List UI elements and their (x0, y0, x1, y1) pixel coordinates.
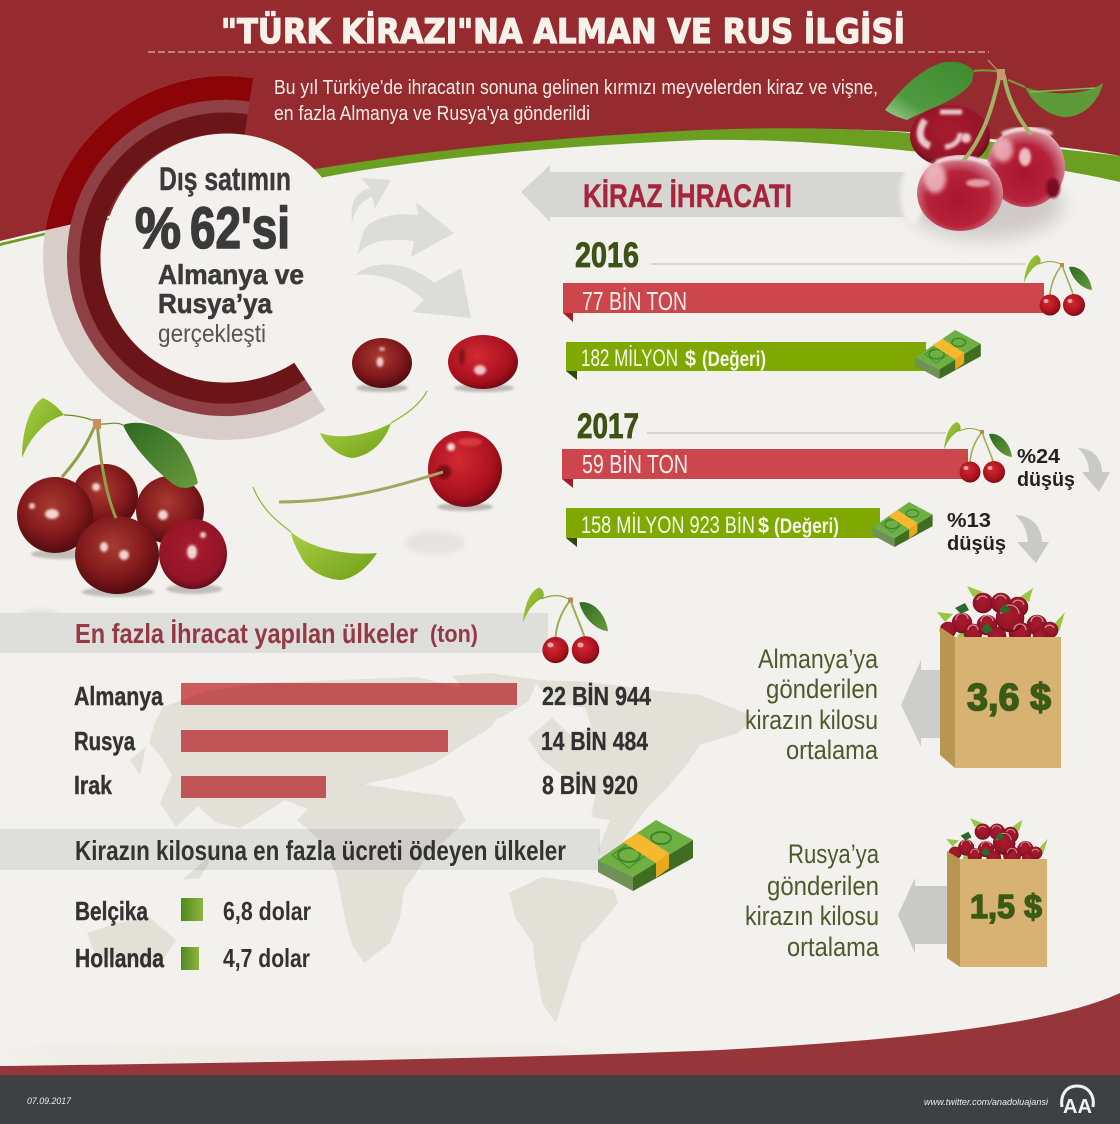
arrow: down 24 (1078, 448, 1110, 492)
bar: 59 bin ton (562, 449, 968, 488)
arrow: left to text (898, 878, 950, 953)
heading band: en fazla ihracat: (ton) (430, 621, 478, 648)
icon: AA logo: AA (1063, 1096, 1092, 1118)
panel: Almanya average price (745, 586, 1065, 768)
row: Hollanda: Hollanda (75, 943, 164, 973)
row: Almanya: Almanya (74, 681, 163, 711)
callout: yuzde 24 dusus: düşüş (1017, 469, 1075, 491)
heading band: kiraz ihracati (521, 165, 910, 222)
bar: 182 milyon dolar: 182 MİLYON (581, 345, 678, 372)
cherry A (352, 338, 412, 392)
illustration: loose cherries and leaves (253, 335, 518, 580)
icon: cherries 2016 (1024, 255, 1092, 316)
arrow: down 13 (1015, 515, 1049, 563)
year 2016: 2016 (575, 236, 639, 275)
callout: yuzde 24 dusus: %24 (1017, 446, 1061, 468)
text: Almanya description: ortalama (786, 735, 879, 765)
icon: cherries in bag: 1,5 $ (970, 888, 1042, 925)
row: Hollanda: 4,7 dolar (223, 943, 310, 973)
text: Rusya description: Rusya’ya (788, 839, 880, 869)
icon: cherries 2017 (944, 422, 1012, 483)
callout text: Almanya ve (158, 259, 304, 290)
heading band: kilosuna en fazla (0, 829, 600, 870)
bar: 158 milyon dolar: 158 MİLYON 923 BİN (581, 512, 755, 539)
bar: 158 milyon dolar: $ (758, 513, 769, 538)
callout text: gerçekleşti (158, 320, 266, 348)
heading band: en fazla ihracat: En fazla İhracat yapılan ülkeler (75, 618, 418, 649)
title: "TÜRK KİRAZI"NA ALMAN VE RUS İLGİSİ (221, 11, 905, 52)
bottom red curve (0, 993, 1120, 1076)
callout: yuzde 13 dusus (947, 510, 1006, 555)
row: Rusya: Rusya (74, 726, 135, 756)
row: Belcika: Belçika (75, 896, 148, 926)
row: Hollanda (75, 943, 310, 973)
text: Almanya description: Almanya’ya (758, 644, 879, 674)
bar: 59 bin ton: 59 BİN TON (582, 449, 688, 479)
top red header shape (0, 0, 1120, 241)
text: Rusya description (745, 839, 880, 962)
icon: cherries in bag: 3,6 $ (967, 677, 1051, 719)
icon: cherries in bag (946, 818, 1048, 967)
callout: yuzde 24 dusus (1017, 446, 1075, 491)
illustration: left cherry cluster (17, 398, 227, 597)
icon: three grey curved arrows (352, 178, 471, 318)
subtitle text: en fazla Almanya ve Rusya'ya gönderildi (274, 103, 590, 125)
bar: 182 milyon dolar: $ (685, 346, 696, 371)
chart: price per kilo (75, 896, 311, 973)
icon: money stack 2016 (915, 330, 981, 379)
panel: circular share callout (55, 88, 351, 428)
subtitle text: Bu yıl Türkiye'de ihracatın sonuna gelinen kırmızı meyvelerden kiraz ve vişne, (274, 77, 878, 99)
bar: 77 bin ton: 77 BİN TON (582, 286, 687, 316)
text: Rusya description: kirazın kilosu (745, 901, 879, 931)
panel: Rusya average price (745, 818, 1048, 967)
icon: cherries section (523, 588, 608, 664)
callout text: 62'si (190, 196, 290, 261)
cherry B (448, 335, 518, 392)
leaf A (320, 391, 427, 458)
illustration: top right cherries (885, 60, 1103, 239)
row: Irak: 8 BİN 920 (542, 770, 638, 800)
subtitle text (274, 77, 878, 125)
icon: money stack section (598, 820, 693, 891)
bar: 77 bin ton (563, 283, 1044, 322)
green curve under header (0, 128, 1120, 246)
twitter link: www.twitter.com/anadoluajansi (924, 1097, 1049, 1108)
callout: yuzde 13 dusus: %13 (947, 510, 991, 532)
callout text (135, 161, 304, 348)
bar: 182 milyon dolar (566, 342, 926, 380)
bar chart: export countries (74, 681, 651, 800)
row: Irak: Irak (74, 770, 112, 800)
row: Rusya: 14 BİN 484 (541, 726, 648, 756)
row: Almanya: 22 BİN 944 (542, 681, 651, 711)
text: Rusya description: ortalama (787, 932, 880, 962)
text: Almanya description: kirazın kilosu (745, 705, 878, 735)
icon: cherries in bag (937, 586, 1065, 768)
footer bar (0, 1075, 1120, 1124)
row: Almanya (74, 681, 651, 711)
text: Almanya description (745, 644, 879, 765)
cherry C with stem (279, 431, 502, 511)
heading band: kiraz ihracati: KİRAZ İHRACATI (583, 178, 792, 214)
heading band: kilosuna en fazla: Kirazın kilosuna en fazla ücreti ödeyen ülkeler (75, 835, 566, 866)
row: Belcika: 6,8 dolar (223, 896, 311, 926)
world map background (87, 673, 756, 1023)
text: Almanya description: gönderilen (766, 674, 878, 704)
bar: 158 milyon dolar: (Değeri) (774, 515, 839, 538)
bar: 182 milyon dolar: (Değeri) (702, 348, 766, 371)
bar: 158 milyon dolar (566, 508, 880, 547)
row: Belcika (75, 896, 311, 926)
row: Irak (74, 770, 638, 800)
callout text: Rusya’ya (158, 288, 272, 319)
row: Rusya (74, 726, 648, 756)
icon: money stack 2017 (872, 502, 933, 547)
panel: 2017 export (562, 407, 1110, 563)
callout text: Dış satımın (159, 161, 291, 197)
year 2017: 2017 (577, 407, 639, 446)
date: 07.09.2017 (27, 1096, 72, 1106)
leaf B (253, 487, 377, 580)
heading band: en fazla ihracat (0, 613, 548, 653)
callout: yuzde 13 dusus: düşüş (947, 533, 1006, 555)
icon: AA logo (1062, 1086, 1093, 1118)
panel: 2016 export (563, 236, 1092, 380)
text: Rusya description: gönderilen (767, 871, 879, 901)
callout text: % (135, 196, 181, 261)
arrow: left to text (901, 660, 945, 747)
